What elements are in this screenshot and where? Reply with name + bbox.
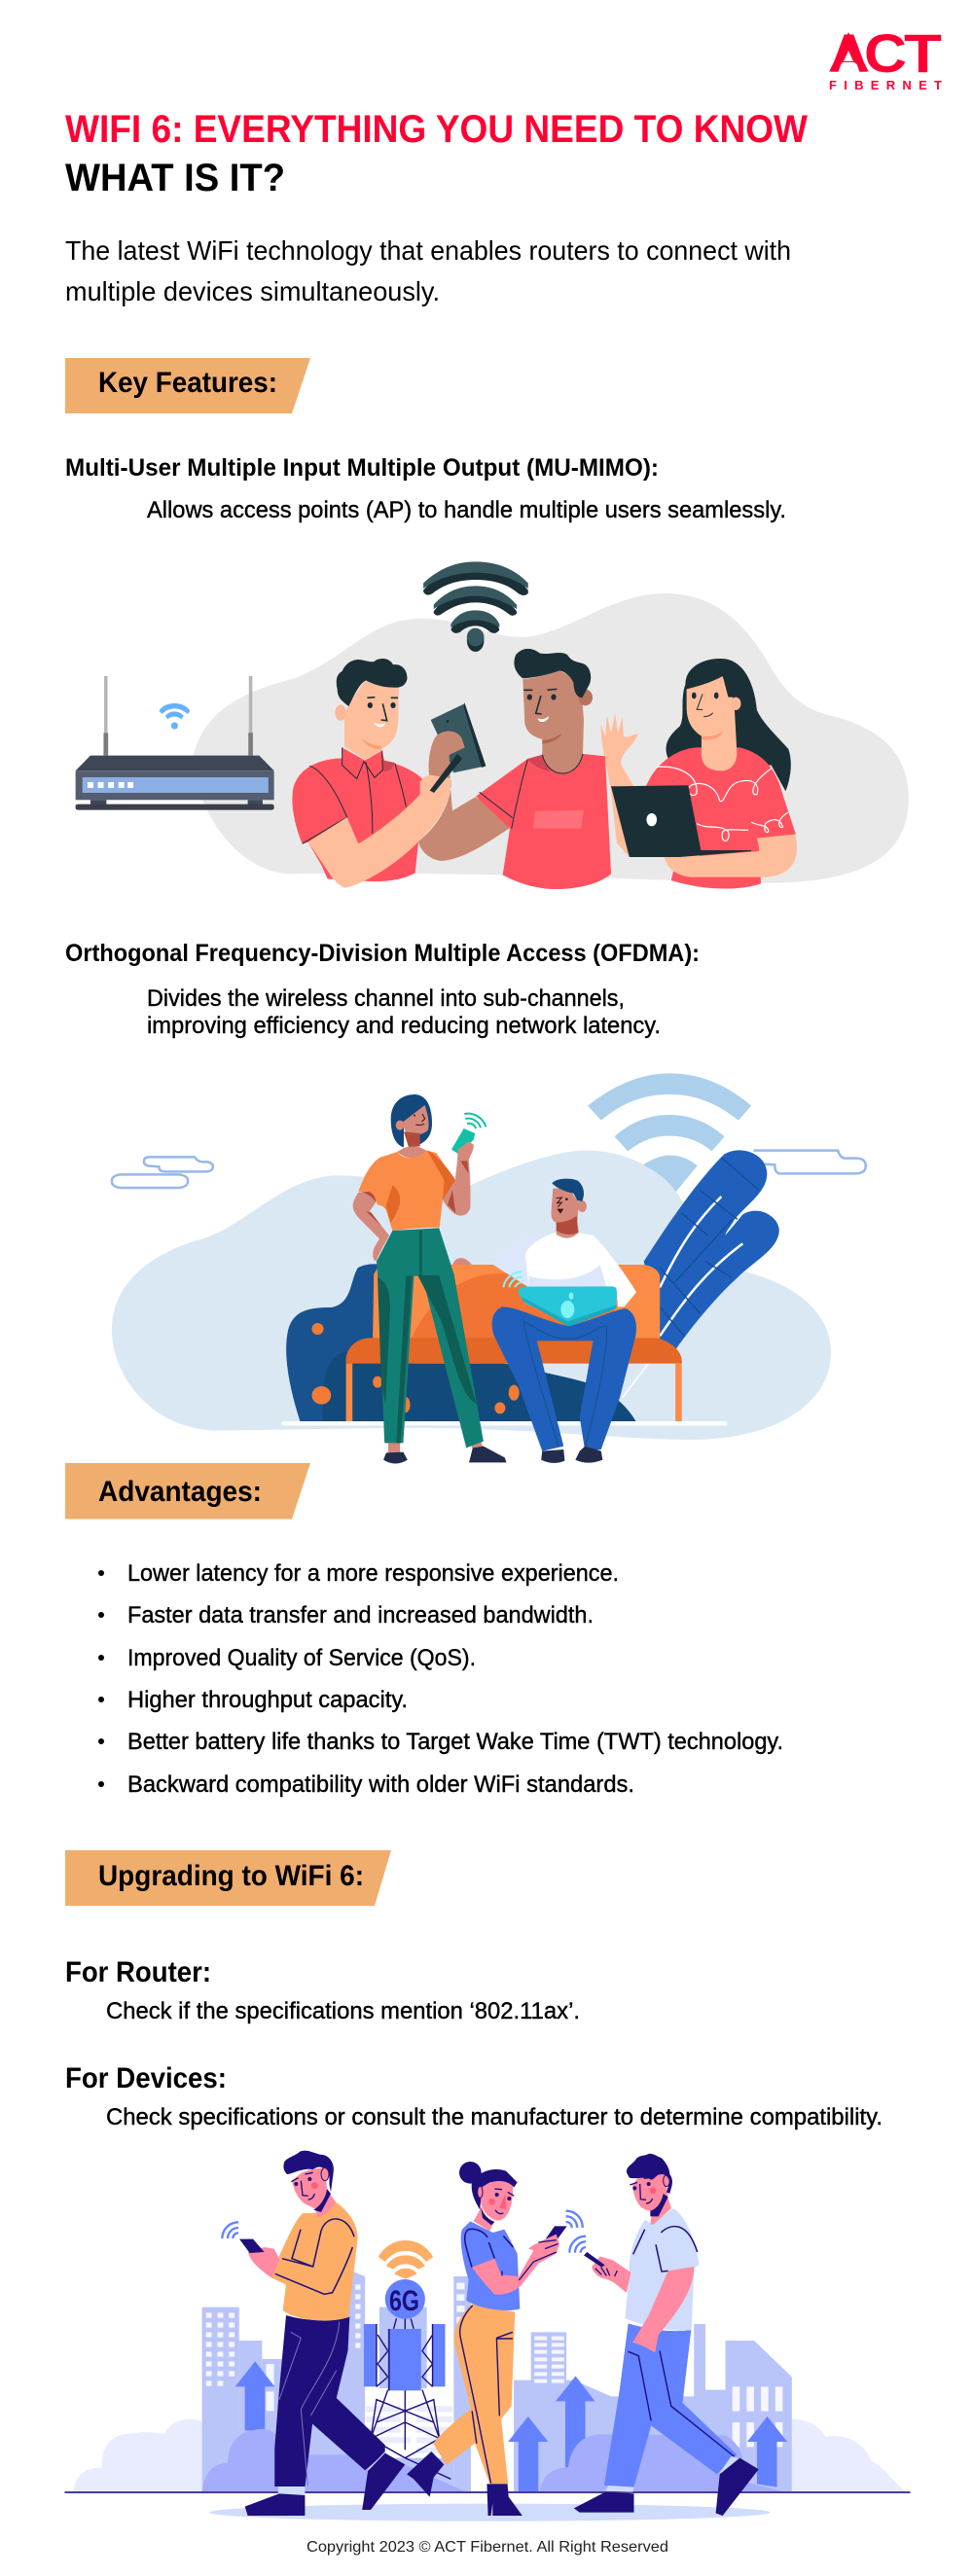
logo: ACT Fibernet: T (904, 22, 942, 84)
city buildings (202, 2271, 792, 2491)
seated man legs (492, 1306, 636, 1463)
illustration: three people walking in a city with a tower (64, 2151, 911, 2522)
tower label: 6G (389, 2285, 419, 2317)
section banner: advantages: Advantages: (98, 1476, 262, 1508)
wifi symbol light blue (588, 1073, 751, 1151)
person: woman with laptop (600, 659, 797, 889)
icon: small blue wifi (159, 703, 190, 730)
clouds (73, 2419, 906, 2491)
bench (281, 1265, 727, 1425)
advantages bullet list: Lower latency for a more responsive experience. (127, 1560, 619, 1587)
title: WIFI 6: EVERYTHING YOU NEED TO KNOW (65, 108, 808, 151)
clouds (112, 1151, 866, 1188)
advantages bullet list (98, 1560, 783, 1798)
subheading: MU-MIMO: Multi-User Multiple Input Multiple Output (MU-MIMO): (65, 454, 659, 482)
text: OFDMA description (147, 985, 661, 1039)
background blob (112, 1151, 831, 1440)
section banner: key features: Key Features: (98, 367, 277, 399)
advantages bullet list: Faster data transfer and increased bandwidth. (127, 1602, 594, 1628)
text: MU-MIMO description: Allows access points (AP) to handle multiple users seamlessly. (147, 497, 786, 523)
subheading: for devices: For Devices: (65, 2062, 227, 2094)
subheading: OFDMA: Orthogonal Frequency-Division Multiple Access (OFDMA): (65, 940, 700, 967)
bush (286, 1264, 433, 1421)
text: OFDMA description: Divides the wireless channel into sub-channels, (147, 985, 625, 1012)
plant leaves (623, 1150, 779, 1398)
man 1 legs (245, 2315, 405, 2516)
intro text (65, 235, 791, 306)
illustration: woman and man on a bench with wifi (112, 1073, 866, 1463)
text: devices check: Check specifications or consult the manufacturer to determine compatibility. (106, 2104, 883, 2130)
advantages bullet list: Improved Quality of Service (QoS). (127, 1645, 476, 1671)
text: router check: Check if the specifications mention ‘802.11ax’. (106, 1998, 580, 2024)
illustration: router and three people with wifi (76, 561, 909, 889)
section banner: upgrading (65, 1850, 391, 1906)
logo: ACT Fibernet (829, 22, 942, 92)
person: man 2 (418, 649, 611, 889)
person: seated man upper body (493, 1179, 636, 1327)
foreground bushes (202, 2429, 782, 2491)
section banner: upgrading: Upgrading to WiFi 6: (98, 1860, 364, 1892)
heading: what is it: WHAT IS IT? (65, 157, 285, 199)
ground line (64, 2491, 911, 2493)
logo: ACT Fibernet: C (864, 22, 907, 84)
person: standing woman upper body (353, 1094, 486, 1265)
background blob (194, 593, 909, 883)
section banner: advantages (65, 1463, 310, 1520)
ground shadow (209, 2504, 770, 2522)
advantages bullet list: Better battery life thanks to Target Wake Time (TWT) technology. (127, 1729, 783, 1755)
icon: tablet (429, 702, 486, 778)
icon: large wifi (423, 561, 528, 652)
person: woman with bun (459, 2162, 583, 2310)
icon: router (76, 676, 274, 810)
advantages bullet list: Higher throughput capacity. (127, 1687, 408, 1713)
person: man 1 (292, 659, 462, 888)
man 3 legs (574, 2323, 759, 2516)
standing woman legs (377, 1228, 506, 1463)
subheading: for router: For Router: (65, 1956, 211, 1988)
person: man with light t-shirt (569, 2154, 699, 2352)
person: man with orange sweater (222, 2151, 358, 2321)
intro text: The latest WiFi technology that enables routers to connect with (65, 235, 791, 266)
copyright footer: Copyright 2023 © ACT Fibernet. All Right Reserved (306, 2539, 668, 2556)
section banner: key features (65, 358, 310, 413)
icon: orange wifi above tower (378, 2240, 433, 2279)
woman legs (407, 2304, 523, 2516)
logo: ACT Fibernet: A (829, 22, 869, 84)
rising arrows (235, 2361, 787, 2487)
logo: ACT Fibernet: FIBERNET (829, 78, 942, 92)
text: OFDMA description: improving efficiency and reducing network latency. (147, 1013, 661, 1039)
icon: cell tower (364, 2279, 450, 2479)
intro text: multiple devices simultaneously. (65, 276, 440, 306)
advantages bullet list: Backward compatibility with older WiFi standards. (127, 1771, 634, 1798)
